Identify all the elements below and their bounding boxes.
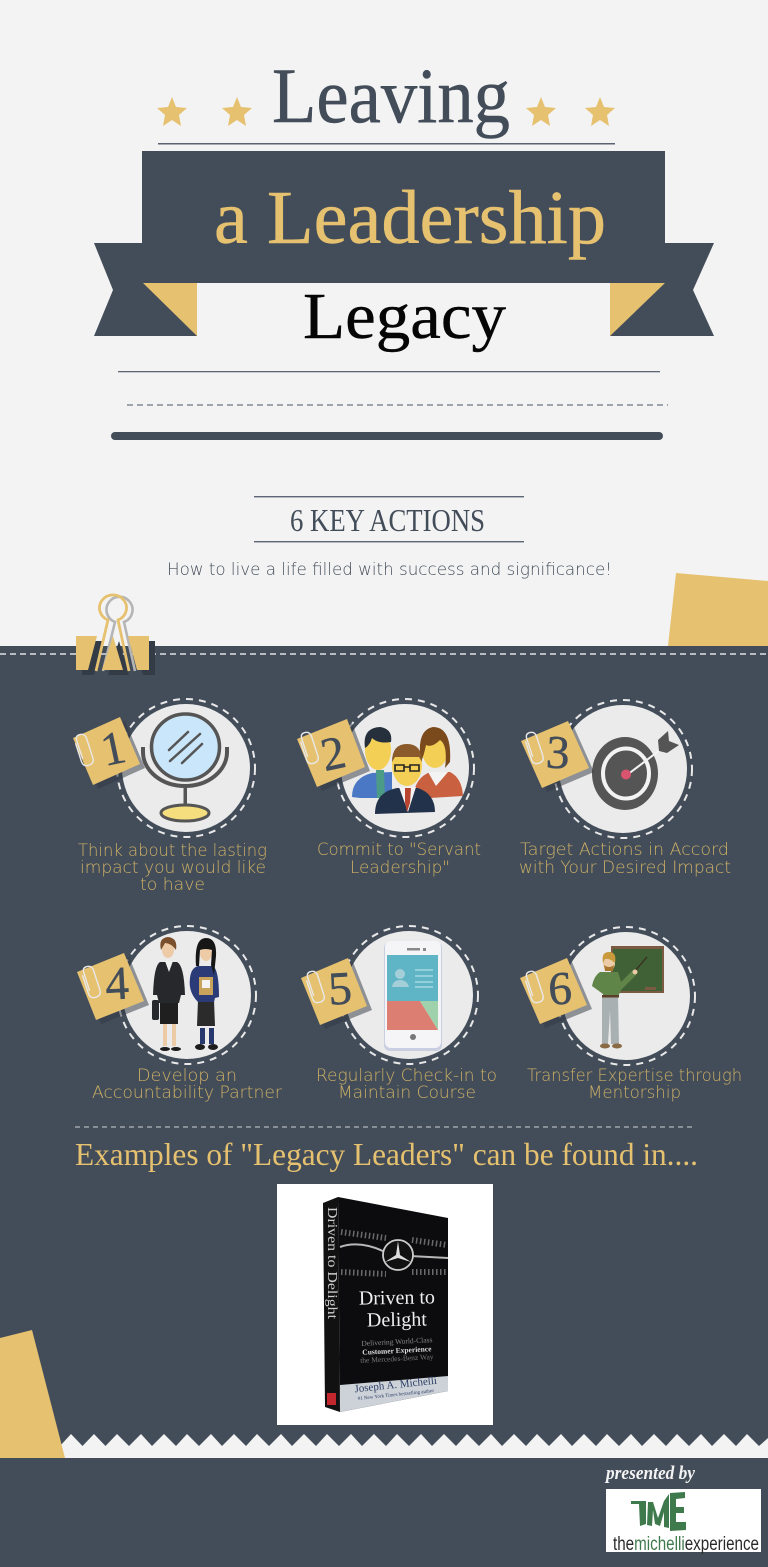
- sticky note 3: [521, 721, 594, 792]
- icon: teacher at chalkboard: [592, 946, 664, 1048]
- step 1: [73, 699, 267, 895]
- step 5: [301, 926, 497, 1103]
- icon: two businesswomen: [152, 937, 219, 1051]
- caption 2: [317, 840, 481, 878]
- caption 3: with Your Desired Impact: [519, 858, 731, 878]
- sticky note 6: [520, 958, 592, 1028]
- dark panel: [0, 646, 768, 1446]
- icon: team of three: [352, 727, 463, 814]
- icon: binder clip: [76, 595, 155, 675]
- step 6: [520, 927, 742, 1103]
- step 2: [297, 699, 481, 878]
- title: a Leadership: a Leadership: [214, 176, 606, 260]
- decorative gold shape bottom left: [0, 1330, 65, 1458]
- book cover: Delight: [367, 1308, 428, 1332]
- caption 3: [519, 840, 731, 878]
- caption 6: [527, 1066, 742, 1103]
- icon: mirror: [143, 714, 227, 821]
- sticky note 4: [77, 953, 149, 1024]
- sticky note 1: [73, 717, 145, 789]
- caption 1: impact you would like: [80, 858, 266, 878]
- logo: the michelli experience: [606, 1489, 761, 1555]
- sticky note 4: 4: [104, 957, 130, 1011]
- footer band: [0, 1458, 768, 1567]
- sticky note 3: 3: [545, 726, 571, 780]
- caption 6: Mentorship: [588, 1083, 681, 1103]
- icon: target with arrow: [592, 731, 679, 810]
- book cover: Driven to: [359, 1286, 435, 1310]
- heading: examples of legacy leaders: Examples of "Legacy Leaders" can be found in....: [75, 1136, 698, 1172]
- decorative gold shape top right: [668, 573, 768, 646]
- caption 5: Maintain Course: [338, 1083, 476, 1103]
- book cover: Delivering World-Class: [361, 1335, 433, 1348]
- caption 2: Commit to "Servant: [317, 840, 481, 860]
- caption 1: Think about the lasting: [78, 841, 267, 861]
- caption 6: Transfer Expertise through: [527, 1066, 742, 1086]
- caption 5: [316, 1066, 497, 1103]
- caption 2: Leadership": [350, 858, 450, 878]
- title: Leaving: Leaving: [272, 52, 510, 139]
- presented by: presented by: [604, 1463, 696, 1484]
- sticky note 5: [301, 958, 372, 1029]
- sticky note 2: [297, 719, 370, 791]
- sticky note 6: 6: [547, 962, 573, 1016]
- sticky note 2: 2: [316, 726, 350, 782]
- caption 5: Regularly Check-in to: [316, 1066, 497, 1086]
- caption 1: to have: [140, 875, 205, 895]
- sticky note 5: 5: [327, 962, 353, 1016]
- book cover: Customer Experience: [362, 1344, 432, 1357]
- sticky note 1: 1: [96, 721, 130, 777]
- caption 4: Accountability Partner: [92, 1083, 282, 1103]
- step 3: [519, 700, 731, 878]
- book spine: [323, 1197, 340, 1412]
- book cover: Joseph A. Michelli: [354, 1375, 437, 1395]
- book spine: Driven to Delight: [324, 1207, 339, 1319]
- heading: 6 key actions: 6 KEY ACTIONS: [290, 502, 485, 538]
- caption 4: Develop an: [137, 1066, 237, 1086]
- subtitle: How to live a life filled with success and significance!: [167, 560, 612, 580]
- stars: [157, 97, 615, 126]
- book cover: [338, 1197, 448, 1412]
- book cover: the Mercedes-Benz Way: [360, 1352, 434, 1365]
- caption 4: [92, 1066, 282, 1103]
- caption 3: Target Actions in Accord: [520, 840, 729, 860]
- ribbon banner: [94, 151, 714, 336]
- step 4: [77, 926, 282, 1103]
- book cover: #1 New York Times bestselling author: [358, 1389, 435, 1402]
- title: Legacy: Legacy: [303, 280, 506, 353]
- book image panel: [277, 1184, 493, 1425]
- zigzag edge: [60, 1434, 768, 1458]
- caption 1: [78, 841, 267, 895]
- icon: smartphone: [384, 941, 442, 1051]
